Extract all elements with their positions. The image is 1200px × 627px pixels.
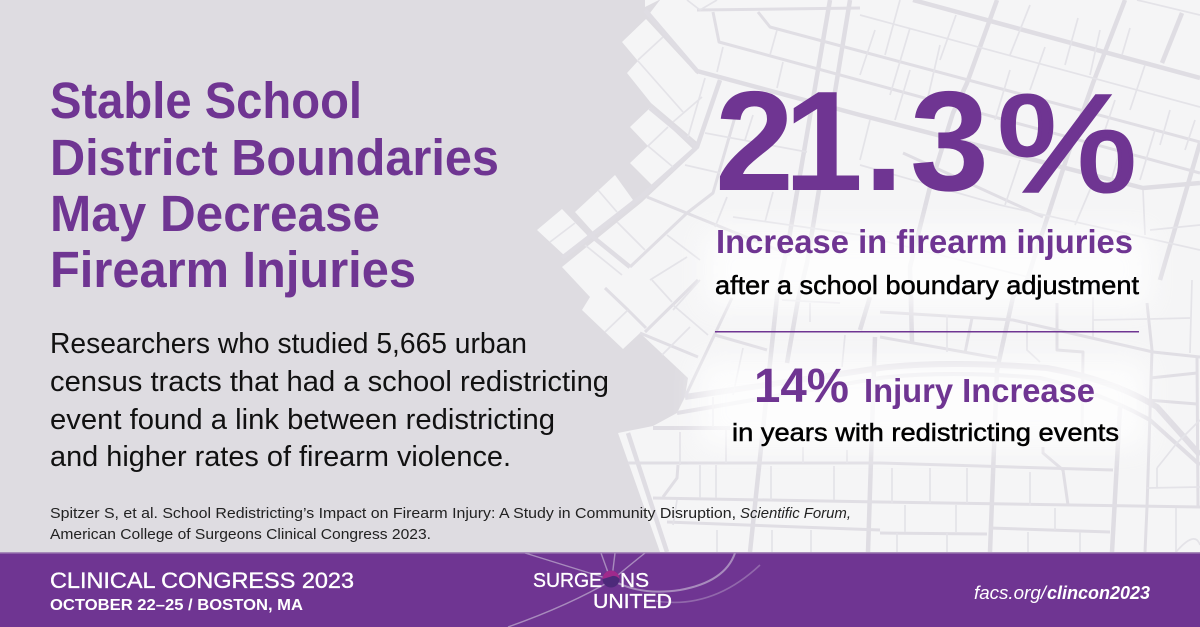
soft white glow behind statistics <box>700 232 1150 447</box>
body text: and higher rates of firearm violence. <box>50 441 511 473</box>
logo: Surgeons United: UNITED <box>593 590 672 613</box>
statistic: 21.3%: 21.3 <box>715 62 989 221</box>
logo: Surgeons United: SURGE <box>533 569 602 592</box>
statistic: 14% injury increase: Injury Increase <box>864 372 1095 409</box>
citation: Scientific Forum, <box>740 505 851 522</box>
footer: website: facs.org/ <box>974 583 1048 603</box>
title <box>50 72 499 298</box>
footer: website <box>974 583 1150 603</box>
footer: website: clincon2023 <box>1047 583 1150 603</box>
statistic: 14% injury increase <box>754 360 1095 413</box>
footer: congress name and dates <box>50 568 354 614</box>
citation: American College of Surgeons Clinical Congress 2023. <box>50 526 431 543</box>
title: District Boundaries <box>50 129 499 186</box>
body text: census tracts that had a school redistricting <box>50 366 609 398</box>
footer band <box>0 552 1200 627</box>
body text <box>50 328 609 473</box>
title: Firearm Injuries <box>50 241 416 298</box>
footer: congress name and dates: CLINICAL CONGRESS 2023 <box>50 568 354 593</box>
title: May Decrease <box>50 185 380 242</box>
logo: Surgeons United <box>508 553 760 627</box>
citation <box>50 505 851 543</box>
logo: Surgeons United: NS <box>620 569 649 592</box>
statistic: 14% injury increase: 14% <box>754 360 849 413</box>
title: Stable School <box>50 72 362 129</box>
body text: Researchers who studied 5,665 urban <box>50 328 527 360</box>
body text: event found a link between redistricting <box>50 404 555 436</box>
divider <box>715 331 1139 332</box>
footer: congress name and dates: OCTOBER 22–25 / BOSTON, MA <box>50 597 303 614</box>
statistic caption: after a school boundary adjustment: after a school boundary adjustment <box>715 270 1140 300</box>
statistic: 21.3% <box>715 62 1137 221</box>
statistic: 21.3%: % <box>997 67 1137 221</box>
statistic label: increase in firearm injuries: Increase in firearm injuries <box>716 223 1133 260</box>
statistic caption: in years with redistricting events: in years with redistricting events <box>732 419 1119 447</box>
street map background <box>537 0 1200 552</box>
citation: Spitzer S, et al. School Redistricting’s Impact on Firearm Injury: A Study in Community Disruption, <box>50 505 736 522</box>
